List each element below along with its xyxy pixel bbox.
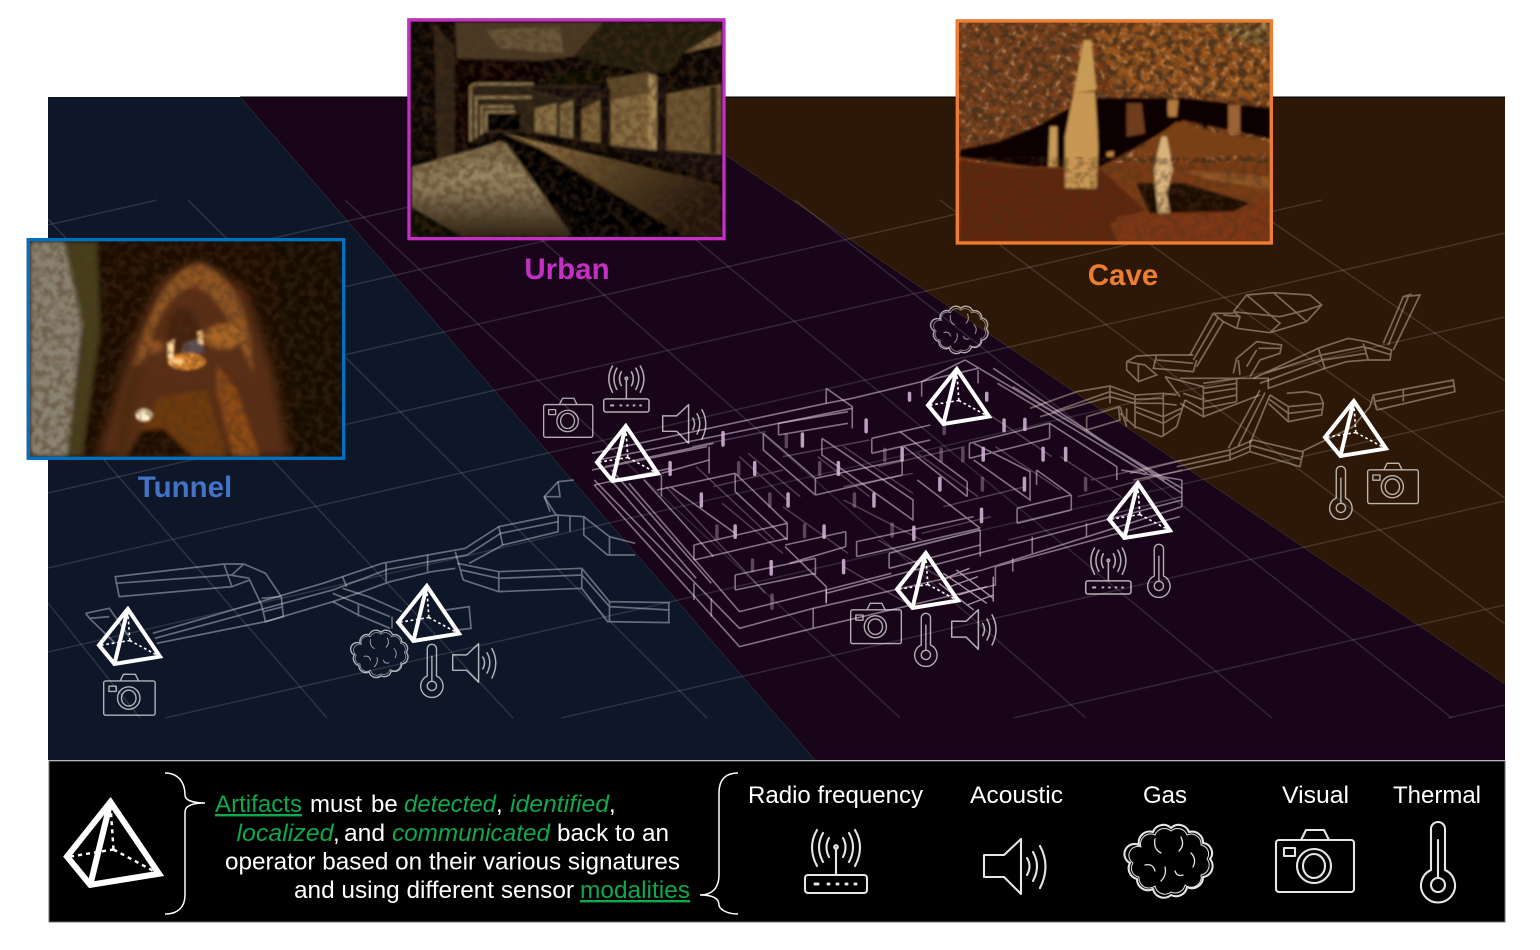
photo: tunnel xyxy=(27,238,345,460)
artifact icon: cave xyxy=(1325,401,1386,456)
icon: camera xyxy=(1276,830,1354,892)
sensor icons: tunnel xyxy=(104,630,496,715)
text block: artifact description: must xyxy=(310,791,362,818)
icon: radio router xyxy=(805,830,867,893)
text block: artifact description: , xyxy=(609,791,616,818)
text block: artifact description: detected xyxy=(404,791,497,818)
icon: camera xyxy=(544,398,593,437)
modality: acoustic xyxy=(970,782,1063,894)
modality: visual: Visual xyxy=(1282,782,1349,809)
photo: urban xyxy=(407,18,725,240)
right brace xyxy=(700,773,738,914)
text block: artifact description: and xyxy=(344,820,385,847)
tunnel frame xyxy=(28,240,344,458)
artifact icon: urban right xyxy=(1109,483,1170,538)
text block: artifact description: Artifacts xyxy=(215,791,302,818)
modality: radio frequency: Radio frequency xyxy=(748,782,923,809)
icon: thermometer xyxy=(421,644,443,697)
artifact icon: urban top xyxy=(928,369,989,424)
modality: thermal xyxy=(1393,782,1481,902)
modality: radio frequency xyxy=(748,782,923,893)
text block: artifact description: and using different sensor xyxy=(294,877,574,904)
icon: speaker xyxy=(952,610,996,649)
artifact icon: urban bottom xyxy=(897,553,958,608)
photo: cave xyxy=(956,19,1273,245)
label: Urban: Urban xyxy=(524,253,610,286)
modality: gas xyxy=(1124,782,1213,898)
icon: gas cloud xyxy=(351,630,408,678)
icon: camera xyxy=(1368,463,1418,504)
text block: artifact description: back to an xyxy=(557,820,669,847)
icon: radio router xyxy=(1086,548,1131,594)
text block: artifact description: operator based on their various signatures xyxy=(225,848,680,876)
icon: artifact pyramid xyxy=(67,802,159,885)
text block: artifact description: communicated xyxy=(392,820,551,847)
band: urban region xyxy=(240,97,1505,760)
text block: artifact description: be xyxy=(371,791,398,818)
artifact icon: urban left xyxy=(597,426,658,481)
left brace xyxy=(165,773,205,914)
modality: gas: Gas xyxy=(1143,782,1187,809)
modality: visual xyxy=(1276,782,1354,892)
panel: legend xyxy=(49,761,1505,922)
sensor icons: urban xyxy=(544,306,1170,666)
wireframe: urban maze xyxy=(592,360,1182,647)
perspective ground grid xyxy=(48,200,1505,718)
cave frame xyxy=(957,21,1271,243)
band: cave region xyxy=(640,97,1505,684)
text block: artifact description: localized xyxy=(236,820,334,847)
modality: acoustic: Acoustic xyxy=(970,782,1063,809)
wireframe: cave system xyxy=(1030,293,1455,480)
wireframe: tunnel system xyxy=(86,480,670,643)
artifact icon: tunnel left xyxy=(99,609,160,664)
text block: artifact description: modalities xyxy=(580,877,690,904)
icon: speaker xyxy=(984,839,1046,894)
icon: gas cloud xyxy=(1124,825,1213,898)
text block: artifact description: , xyxy=(333,820,340,847)
icon: gas cloud xyxy=(931,306,988,354)
icon: speaker xyxy=(663,405,706,443)
artifact icon: tunnel middle xyxy=(398,586,459,641)
modality: thermal: Thermal xyxy=(1393,782,1481,809)
background: underground environment bands xyxy=(48,96,1505,760)
icon: speaker xyxy=(453,644,496,682)
icon: thermometer xyxy=(1330,466,1352,519)
label: Cave: Cave xyxy=(1088,259,1158,292)
icon: thermometer xyxy=(1148,544,1170,597)
band: tunnel region xyxy=(48,97,815,760)
urban frame xyxy=(409,20,724,239)
icon: thermometer xyxy=(1421,822,1455,902)
icon: radio router xyxy=(604,366,649,412)
icon: camera xyxy=(851,603,901,644)
text block: artifact description: identified xyxy=(510,791,610,818)
icon: thermometer xyxy=(915,613,937,666)
text block: artifact description: , xyxy=(496,791,503,818)
sensor icons: cave xyxy=(1330,463,1418,519)
icon: camera xyxy=(104,674,155,715)
label: Tunnel: Tunnel xyxy=(138,471,232,504)
